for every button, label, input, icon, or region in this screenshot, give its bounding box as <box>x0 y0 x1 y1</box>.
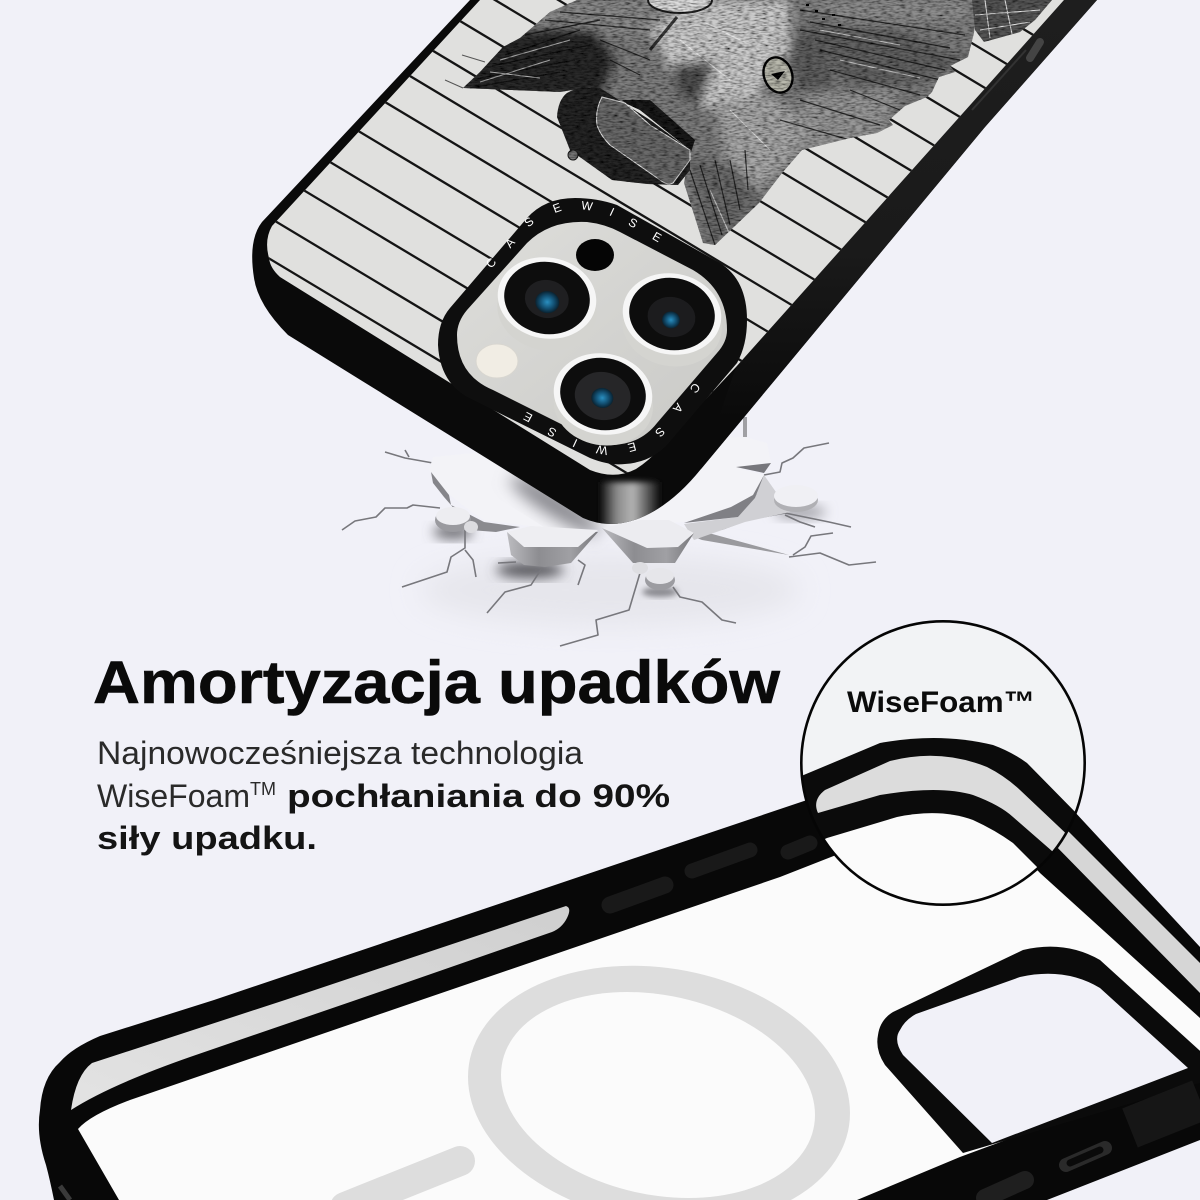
phone case bottom: black frame <box>39 760 1200 1200</box>
CASEWISE lettering upper arc: C <box>483 255 499 271</box>
CASEWISE lettering upper arc: S <box>626 215 640 231</box>
camera island ring <box>438 198 747 464</box>
phone back panel with stripes <box>267 0 1064 475</box>
cracked ground impact <box>342 417 876 646</box>
magnifier label: WiseFoam™ <box>847 686 1035 719</box>
camera opening <box>457 222 730 453</box>
lens 3 <box>545 346 661 453</box>
cat mouth <box>648 0 712 13</box>
CASEWISE lettering lower arc: E <box>626 439 638 455</box>
cat nose dots <box>806 4 841 26</box>
body text: siły upadku. <box>97 820 317 856</box>
CASEWISE lettering lower arc: S <box>545 424 559 440</box>
CASEWISE lettering upper arc: S <box>521 214 537 230</box>
CASEWISE lettering lower arc: E <box>521 409 535 425</box>
charging port hole <box>60 1186 70 1200</box>
CASEWISE lettering lower arc: W <box>595 442 609 458</box>
body text: TM <box>250 779 276 799</box>
foam strip right <box>1050 830 1200 993</box>
side buttons <box>610 843 810 905</box>
CASEWISE lettering upper arc <box>483 198 664 271</box>
magnifier circle <box>800 620 1086 906</box>
body text <box>97 735 670 856</box>
microphone hole <box>576 239 614 271</box>
lens 2 <box>614 266 730 374</box>
plaid bow <box>972 0 1052 42</box>
magnet orientation bar <box>345 1161 460 1200</box>
lens 1 <box>489 250 605 358</box>
CASEWISE lettering upper arc: W <box>580 198 594 214</box>
cat head <box>463 0 974 245</box>
cat eye <box>762 56 794 94</box>
camera cutout opening <box>897 974 1188 1143</box>
magnetic ring <box>468 949 850 1200</box>
body text: WiseFoam <box>97 778 250 814</box>
camera cutout frame <box>877 947 1200 1153</box>
CASEWISE lettering lower arc: S <box>652 424 668 440</box>
foam strip left <box>71 906 569 1110</box>
body text: pochłaniania do 90% <box>287 778 670 814</box>
CASEWISE lettering lower arc <box>521 380 703 458</box>
body text: Najnowocześniejsza technologia <box>97 735 583 771</box>
CASEWISE lettering upper arc: I <box>608 205 616 219</box>
collar <box>557 87 690 185</box>
CASEWISE lettering upper arc: E <box>650 229 664 245</box>
bottom side buttons <box>985 1100 1200 1198</box>
cat illustration <box>450 0 1052 260</box>
flash <box>476 344 518 378</box>
title: Amortyzacja upadków <box>93 649 780 716</box>
CASEWISE lettering upper arc: E <box>551 200 563 216</box>
phone case top: black bumper <box>252 0 1097 530</box>
CASEWISE lettering lower arc: C <box>687 380 703 396</box>
CASEWISE lettering lower arc: I <box>571 436 579 450</box>
CASEWISE lettering upper arc: A <box>502 235 518 251</box>
CASEWISE lettering lower arc: A <box>670 400 686 416</box>
clear back interior <box>78 830 1200 1200</box>
